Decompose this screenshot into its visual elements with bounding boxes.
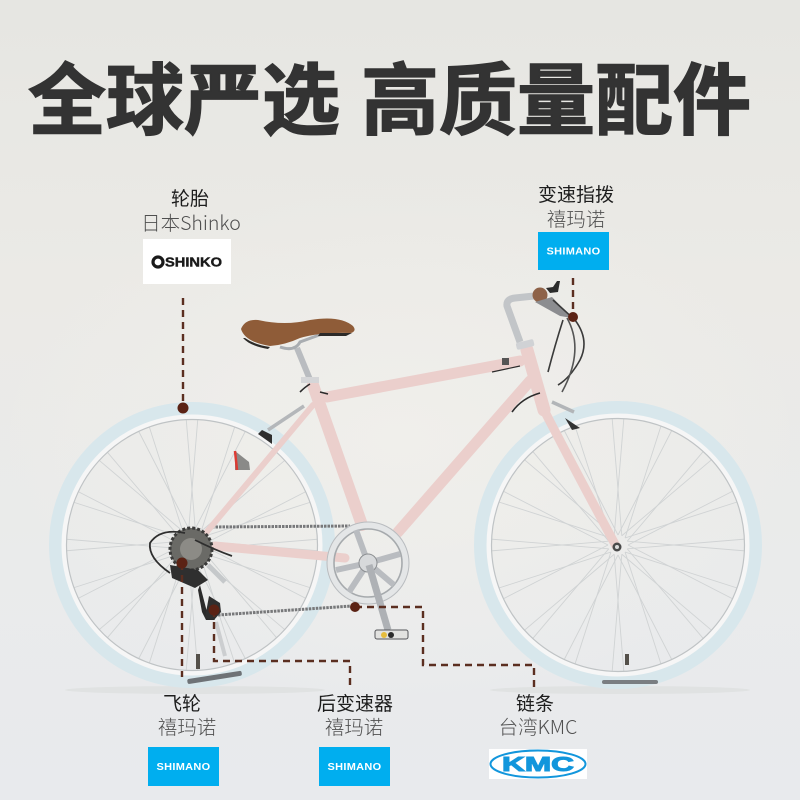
label: flywheel — [148, 689, 219, 786]
callout line: chain — [350, 602, 534, 692]
chain — [212, 526, 352, 615]
label: tyre: 日本Shinko — [141, 207, 241, 236]
label: rear derailleur: 后变速器 — [317, 689, 393, 716]
callout line: tyre — [178, 298, 188, 414]
label: shifter: 禧玛诺 — [547, 203, 605, 232]
label: tyre — [141, 184, 241, 284]
label: tyre: 轮胎 — [171, 184, 209, 211]
callout line: flywheel — [176, 558, 188, 677]
seat post and saddle — [241, 318, 355, 383]
label: shifter — [538, 180, 614, 270]
label: rear derailleur: 禧玛诺 — [325, 711, 383, 740]
front wheel — [480, 408, 756, 684]
bicycle illustration — [56, 281, 756, 684]
title — [28, 39, 751, 151]
logo: Shimano: SHIMANO — [546, 246, 600, 258]
logo: KMC: KMC — [502, 754, 574, 776]
label: chain: 台湾KMC — [499, 711, 577, 740]
logo: Shinko: SHINKO — [165, 256, 222, 270]
rear wheel — [56, 408, 328, 684]
chainring and crank — [327, 522, 409, 639]
logo: Shimano: SHIMANO — [156, 762, 210, 773]
title: 全球严选 — [28, 39, 340, 151]
label: chain: 链条 — [516, 689, 554, 716]
front brake and hub — [552, 402, 622, 552]
logo: Shimano: SHIMANO — [328, 762, 382, 773]
rear brake and reflector — [235, 384, 328, 470]
label: chain — [489, 689, 587, 779]
rear derailleur and cassette — [150, 528, 232, 656]
label: flywheel: 飞轮 — [163, 689, 201, 716]
handlebar and shifter — [492, 281, 584, 412]
label: flywheel: 禧玛诺 — [158, 711, 216, 740]
title: 高质量配件 — [361, 39, 751, 151]
frame — [200, 350, 616, 558]
label: shifter: 变速指拨 — [538, 180, 614, 207]
label: rear derailleur — [317, 689, 393, 786]
callout line: rear derailleur — [208, 604, 350, 687]
callout line: shifter — [568, 278, 578, 322]
